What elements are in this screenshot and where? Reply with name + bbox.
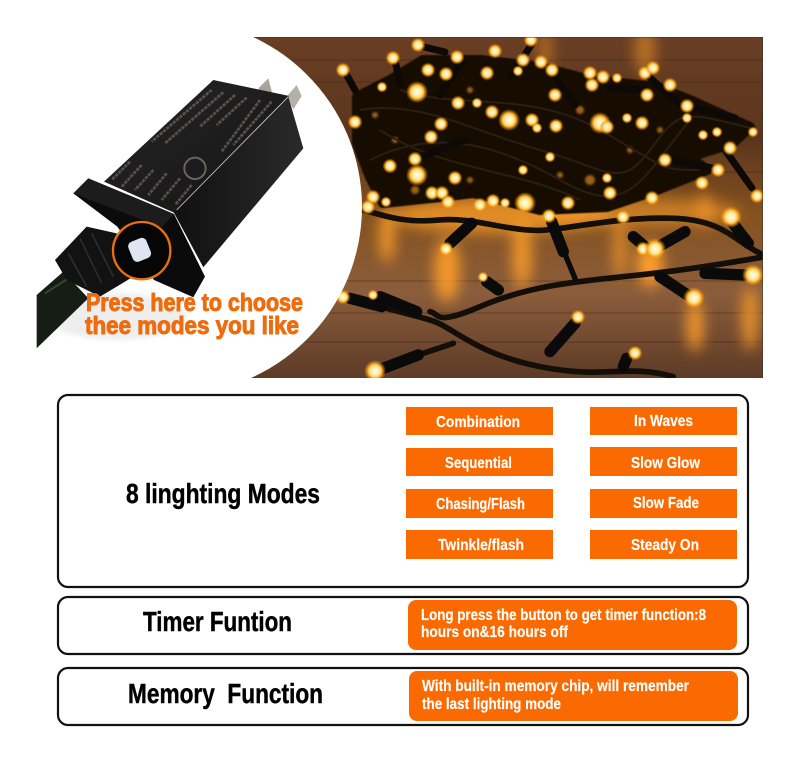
button xyxy=(127,236,153,263)
mode: Slow Fade: Slow Fade xyxy=(633,495,699,512)
callout: press here text: thee modes you like xyxy=(85,312,299,340)
callout: press here text xyxy=(85,289,303,340)
mode: Combination: Combination xyxy=(436,414,520,431)
mode: Steady On xyxy=(590,530,737,559)
mode: Slow Glow xyxy=(590,447,737,476)
mode: In Waves: In Waves xyxy=(634,413,693,430)
light cluster: wire tangle xyxy=(345,42,752,210)
connector xyxy=(55,227,133,297)
mode: Sequential: Sequential xyxy=(445,455,512,472)
product photo: power adapter with button xyxy=(37,78,303,348)
timer description xyxy=(408,600,737,650)
mode: Twinkle/flash xyxy=(406,530,553,559)
heading: memory function: Memory Function xyxy=(128,678,323,709)
white circular inset background xyxy=(0,19,362,395)
plug prongs xyxy=(258,78,272,93)
timer description: hours on&16 hours off xyxy=(421,624,569,641)
panel: 8 lighting modes xyxy=(58,395,748,587)
panel: memory function xyxy=(58,668,748,725)
photo: warm white string lights on wooden floor xyxy=(248,26,764,382)
timer description: Long press the button to get timer function:8 xyxy=(421,607,706,624)
callout: press here text: Press here to choose xyxy=(86,289,303,317)
cable xyxy=(37,272,88,348)
mode: Slow Fade xyxy=(590,489,737,518)
mode: Chasing/Flash xyxy=(406,489,553,518)
button highlight ring xyxy=(113,222,170,279)
amber bulbs xyxy=(336,32,764,382)
panel: timer function xyxy=(58,597,748,654)
adapter flange xyxy=(73,178,205,297)
adapter label face xyxy=(104,80,289,213)
heading: timer function: Timer Funtion xyxy=(143,606,292,637)
lower wires and bulb holders xyxy=(340,210,762,377)
floor light reflections xyxy=(380,26,758,351)
mode: Combination xyxy=(406,407,553,435)
memory description: the last lighting mode xyxy=(422,696,561,713)
mode: Steady On: Steady On xyxy=(631,537,699,554)
mode: Slow Glow: Slow Glow xyxy=(631,455,701,472)
mode: Chasing/Flash: Chasing/Flash xyxy=(436,496,525,513)
memory description xyxy=(409,671,738,721)
memory description: With built-in memory chip, will remember xyxy=(422,678,689,695)
mode: Sequential xyxy=(406,448,553,476)
adapter side xyxy=(173,97,303,267)
mode: In Waves xyxy=(590,407,737,435)
mode: Twinkle/flash: Twinkle/flash xyxy=(438,537,524,554)
heading: 8 lighting modes: 8 linghting Modes xyxy=(126,478,320,509)
